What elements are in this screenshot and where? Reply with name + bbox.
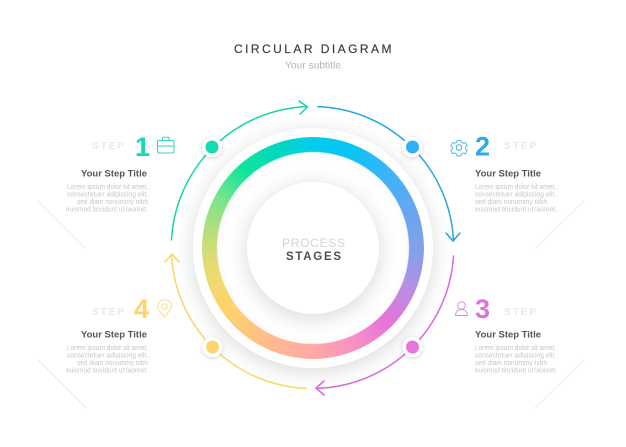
icon: briefcase <box>158 137 174 153</box>
center disc <box>246 182 378 314</box>
step 2 title: Your Step Title <box>475 168 541 180</box>
step 2 number: 2 <box>475 132 490 162</box>
arrow: pink arc <box>316 256 454 395</box>
dot: yellow <box>202 337 222 357</box>
step 3 text: Lorem ipsum dolor sit amet, <box>475 345 556 352</box>
center label: STAGES <box>286 251 341 263</box>
step 4 number: 4 <box>134 294 149 324</box>
title: CIRCULAR DIAGRAM <box>234 42 392 56</box>
dot: teal <box>202 137 222 157</box>
step 3 number: 3 <box>475 294 490 324</box>
step 1 text: consectetuer adipiscing elit, <box>67 192 148 198</box>
step 4 text: Lorem ipsum dolor sit amet, <box>67 345 148 352</box>
step 3 text: consectetuer adipiscing elit, <box>475 352 556 360</box>
icon: person <box>456 302 468 316</box>
outer white disc <box>192 128 432 368</box>
icon: map pin <box>158 300 172 317</box>
subtitle: Your subtitle <box>285 60 341 72</box>
step 2 text: Lorem ipsum dolor sit amet, <box>475 184 556 191</box>
step 3 label: STEP <box>504 307 536 318</box>
step 1 text: sed diam nonummy nibh <box>77 199 148 206</box>
ring hole with soft inner shading <box>216 152 408 344</box>
center label <box>282 236 345 263</box>
arrow: yellow arc <box>165 254 306 388</box>
center label: PROCESS <box>282 236 345 250</box>
step 1 label: STEP <box>92 141 124 152</box>
panel: step 4 <box>66 294 172 374</box>
step 2 label: STEP <box>504 141 536 152</box>
step 2 text: euismod tincidunt ut laoreet. <box>475 206 557 214</box>
panel: step 3 <box>456 294 557 374</box>
panel: step 2 <box>451 132 557 214</box>
step 1 title: Your Step Title <box>81 168 147 180</box>
dot: pink <box>402 337 422 357</box>
dot: blue <box>402 137 422 157</box>
panel: step 1 <box>66 132 174 214</box>
arrow: teal arc <box>172 101 308 240</box>
step 4 title: Your Step Title <box>81 330 147 340</box>
step 2 text <box>475 184 557 214</box>
step 4 text <box>66 345 148 374</box>
decorative lines <box>38 201 584 408</box>
step 3 text: sed diam nonummy nibh <box>475 360 547 367</box>
step 3 title: Your Step Title <box>475 330 541 340</box>
step 3 text: euismod tincidunt ut laoreet. <box>475 368 557 374</box>
gradient ring <box>202 136 424 358</box>
arrow: blue arc <box>318 107 460 241</box>
step 4 text: consectetuer adipiscing elit, <box>67 352 148 360</box>
step 1 text: euismod tincidunt ut laoreet. <box>66 206 148 214</box>
icon: gear <box>451 140 467 156</box>
step 1 number: 1 <box>135 132 150 162</box>
step 1 text <box>66 184 148 214</box>
step 4 text: euismod tincidunt ut laoreet. <box>66 368 148 374</box>
step 1 text: Lorem ipsum dolor sit amet, <box>67 184 148 191</box>
step 2 text: consectetuer adipiscing elit, <box>475 192 556 198</box>
step 4 label: STEP <box>92 307 124 318</box>
step 3 text <box>475 345 557 374</box>
step 4 text: sed diam nonummy nibh <box>77 360 148 367</box>
step 2 text: sed diam nonummy nibh <box>475 199 547 206</box>
